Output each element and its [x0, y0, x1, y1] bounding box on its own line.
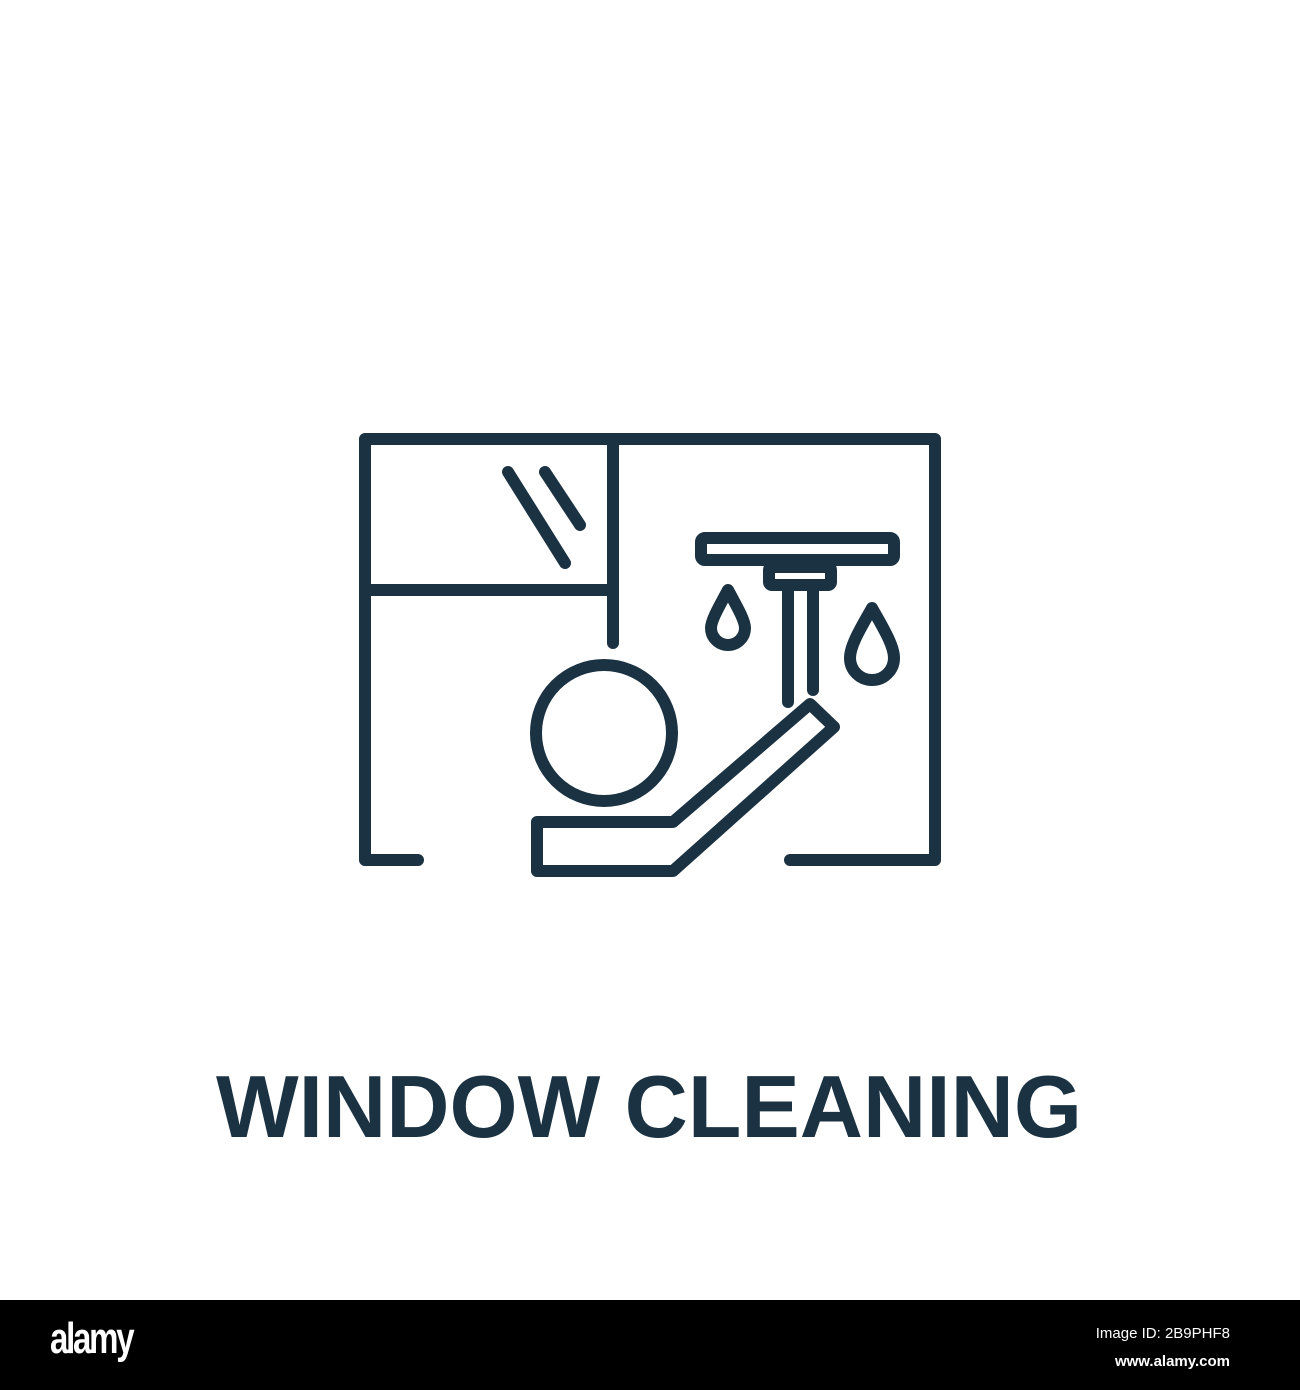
- glass reflection: [508, 472, 580, 563]
- arm: [537, 704, 834, 871]
- head: [536, 665, 672, 801]
- squeegee: [701, 538, 894, 702]
- footer bar: [0, 1300, 1300, 1390]
- water drops: [711, 590, 894, 680]
- logo: alamy: [50, 1314, 132, 1363]
- image id: www.alamy.com: [1115, 1353, 1230, 1370]
- title: WINDOW CLEANING: [216, 1057, 1082, 1156]
- image id: Image ID: 2B9PHF8: [1096, 1325, 1230, 1342]
- image id: [1096, 1325, 1230, 1370]
- window frame: [365, 439, 935, 860]
